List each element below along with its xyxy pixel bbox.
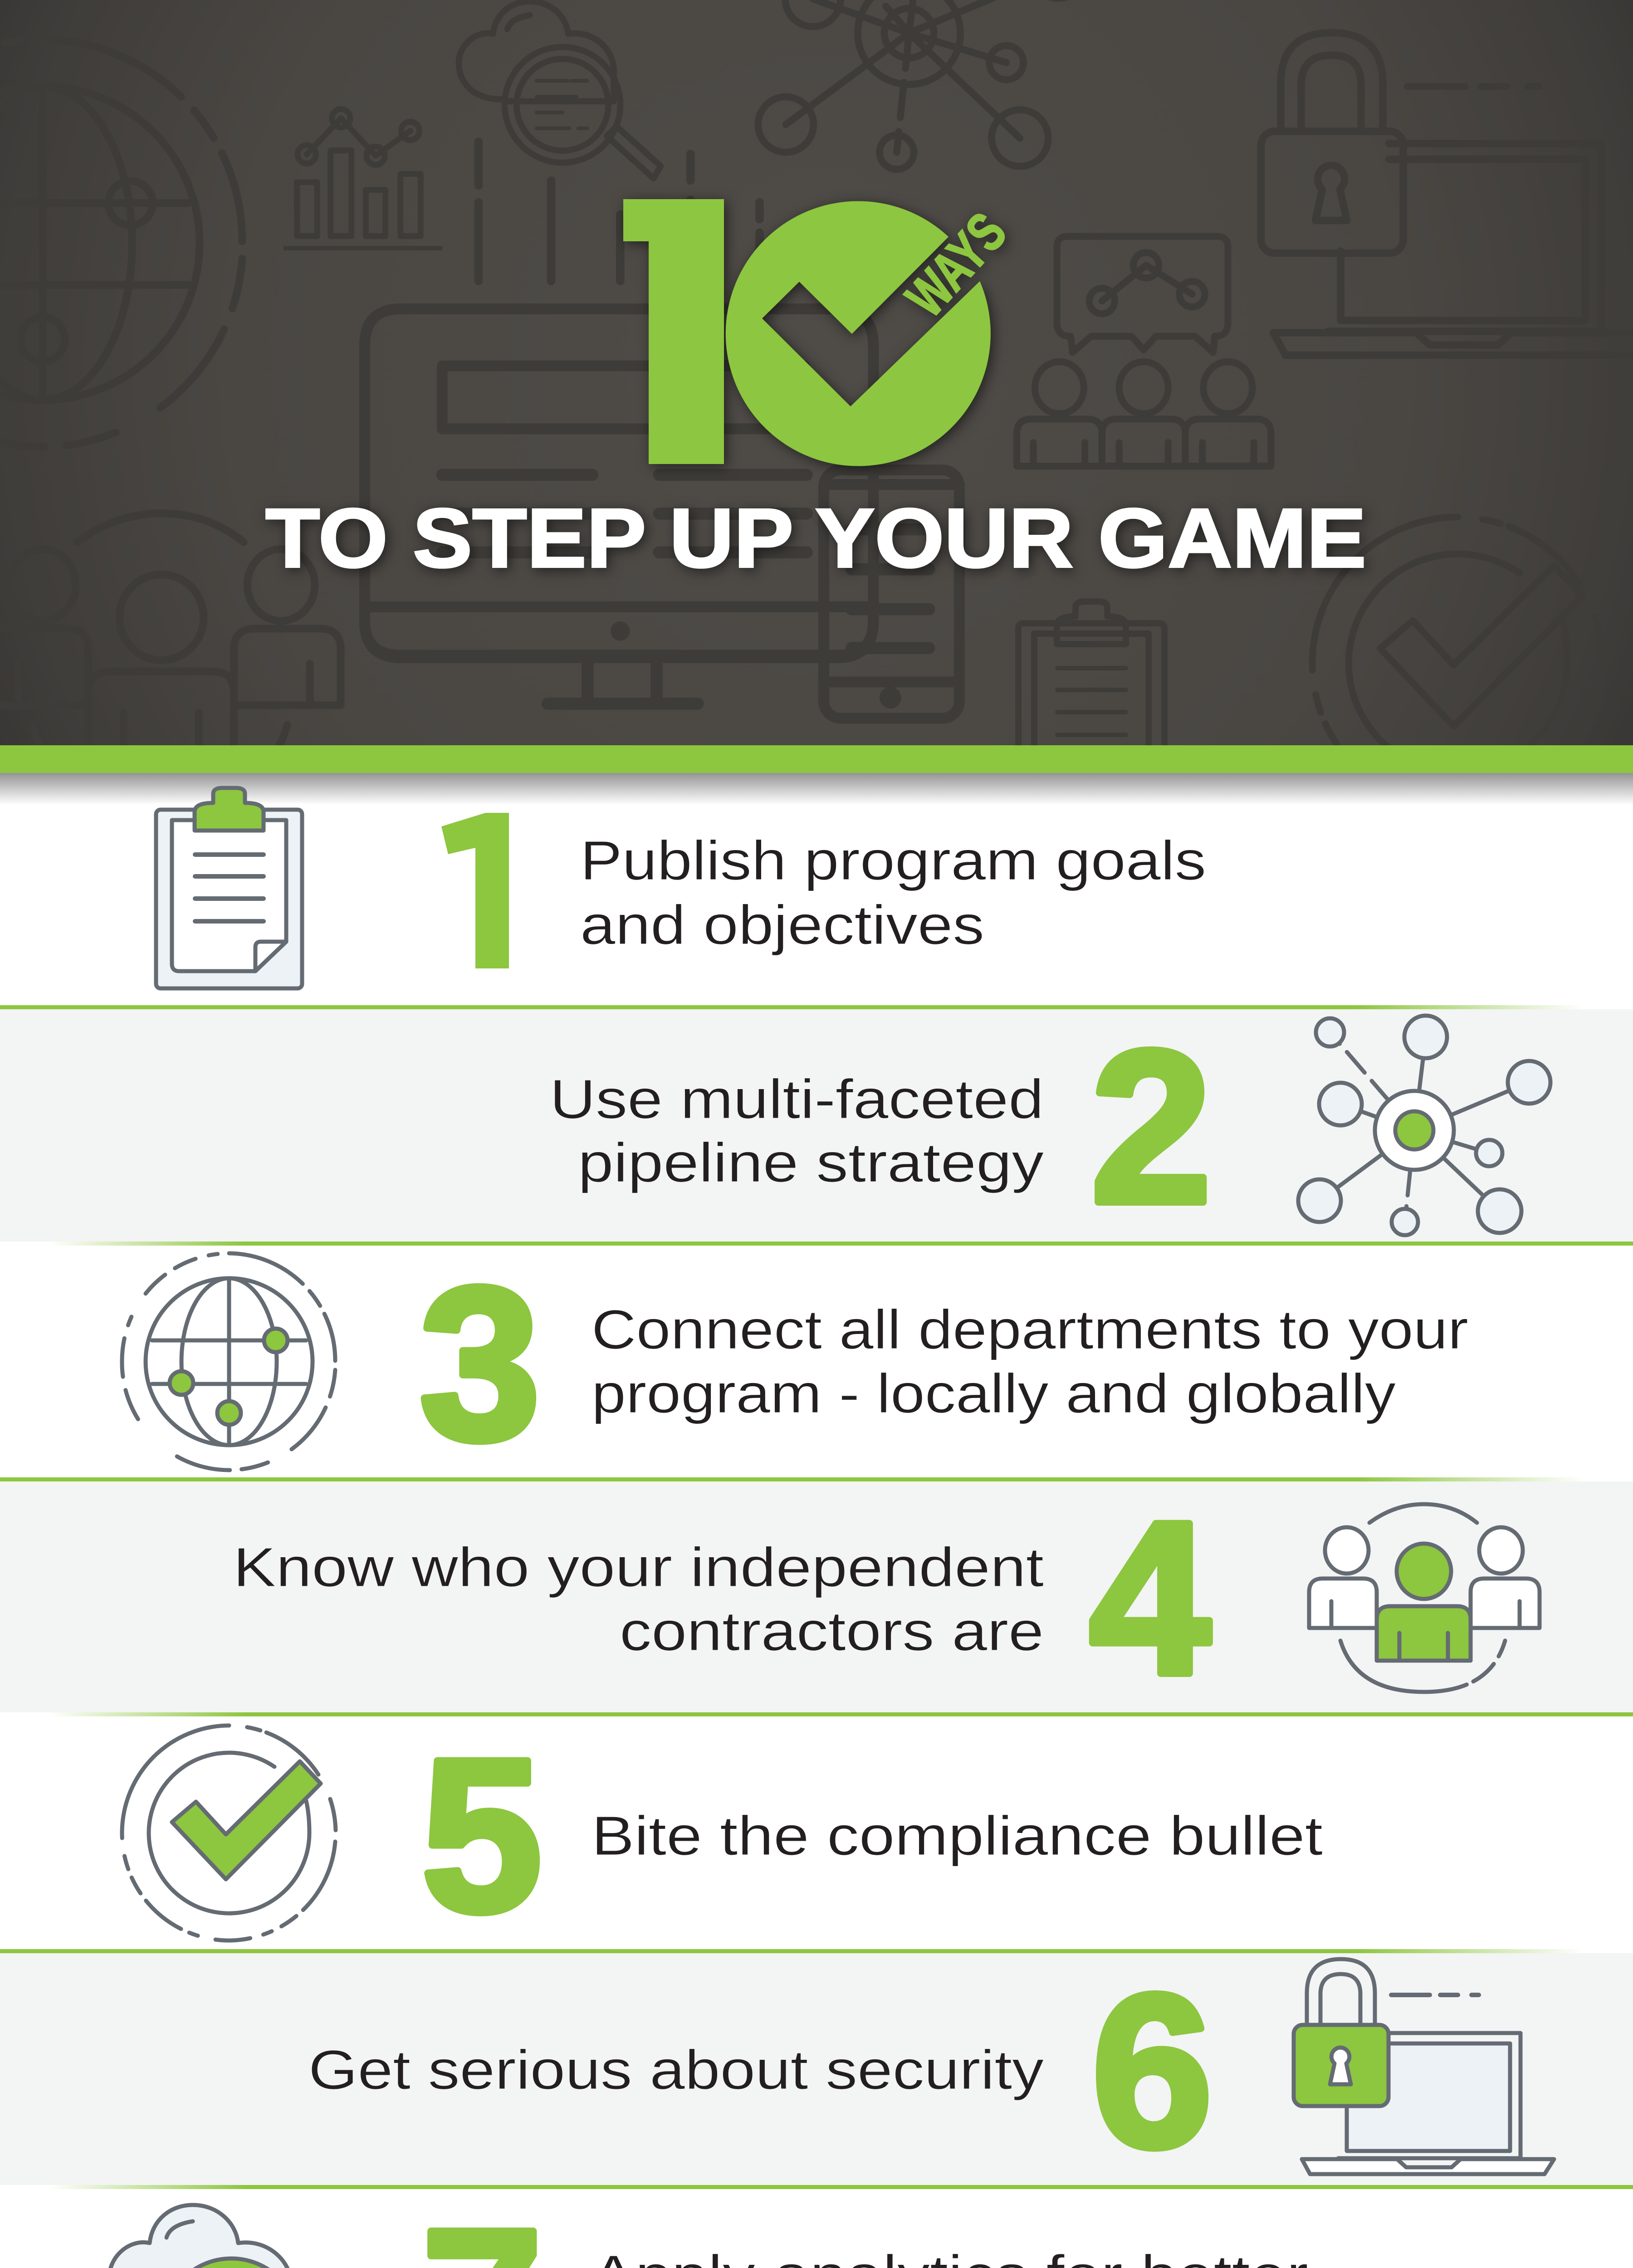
ghost icon: lock and laptop — [1257, 29, 1509, 359]
number 3: 3 — [420, 1242, 540, 1485]
text: step 1: Publish program goals — [580, 830, 1206, 891]
row background — [0, 1953, 1633, 2185]
logo numeral 0 with check cut-out: 0 — [755, 98, 957, 503]
number 6: 6 — [1092, 1949, 1213, 2192]
panel: step 2 — [0, 1005, 1633, 1248]
icon: cloud and magnifier — [109, 2205, 347, 2268]
text: step 5: Bite the compliance bullet — [592, 1805, 1323, 1867]
ghost icon: globe — [123, 92, 246, 411]
text: step 4: contractors are — [620, 1600, 1044, 1662]
text: step 4: Know who your independent — [233, 1536, 1044, 1598]
icon: network — [1298, 1016, 1550, 1235]
panel: step 3 — [122, 1242, 1468, 1485]
ghost icon: network — [758, 0, 1086, 169]
icon: lock and laptop — [1294, 1959, 1554, 2174]
panel: step 7 — [109, 2184, 1308, 2268]
ghost icon: cloud search — [459, 1, 661, 178]
header green band — [0, 745, 1633, 773]
text: step 1 — [580, 830, 1206, 956]
text: step 2 — [550, 1068, 1044, 1193]
number 1: 1 — [427, 767, 548, 1011]
panel: step 1 — [156, 767, 1206, 1011]
number 5: 5 — [421, 1713, 542, 1957]
icon: check circle — [122, 1725, 336, 1941]
text: step 3: Connect all departments to your — [592, 1299, 1468, 1360]
ghost icon pattern — [0, 0, 1633, 809]
divider line 4 — [0, 1712, 1633, 1716]
ghost icon: monitor and phone — [365, 142, 959, 718]
ghost icon: people — [0, 513, 341, 804]
title: TO STEP UP YOUR GAME — [265, 492, 1366, 585]
logo: 10 ways with check mark — [555, 90, 1018, 552]
text: step 3: program - locally and globally — [592, 1363, 1396, 1424]
panel: step 5 — [122, 1713, 1323, 1957]
text: step 3 — [592, 1299, 1468, 1424]
number 4: 4 — [1090, 1476, 1212, 1720]
logo word: WAYS: WAYS — [895, 201, 1018, 328]
divider line 1 — [0, 1005, 1633, 1009]
panel: dark header — [0, 0, 1633, 809]
text: step 2: pipeline strategy — [578, 1132, 1044, 1193]
panel: step 4 — [0, 1476, 1633, 1720]
number 2: 2 — [1091, 1005, 1212, 1248]
icon: clipboard — [156, 788, 302, 988]
icon: globe — [122, 1253, 335, 1470]
divider line 2 — [0, 1242, 1633, 1246]
text: step 6: Get serious about security — [308, 2039, 1044, 2101]
icon: people — [1309, 1504, 1540, 1692]
ghost icon: clipboard — [1018, 601, 1164, 802]
row background — [0, 1481, 1633, 1712]
header background — [0, 0, 1633, 745]
divider line 3 — [0, 1477, 1633, 1481]
divider line 6 — [0, 2185, 1633, 2189]
logo numeral 1: 1 — [555, 90, 797, 552]
ghost icon: chart — [284, 109, 442, 248]
panel: step 6 — [0, 1949, 1633, 2192]
row background — [0, 1009, 1633, 1242]
text: step 4 — [233, 1536, 1044, 1662]
text: step 2: Use multi-faceted — [550, 1068, 1044, 1130]
text: step 1: and objectives — [580, 894, 984, 956]
divider line 5 — [0, 1949, 1633, 1953]
ghost icon: check circle — [1312, 517, 1603, 809]
header band shadow — [0, 773, 1633, 805]
ghost icon: speech and people — [1017, 236, 1271, 466]
